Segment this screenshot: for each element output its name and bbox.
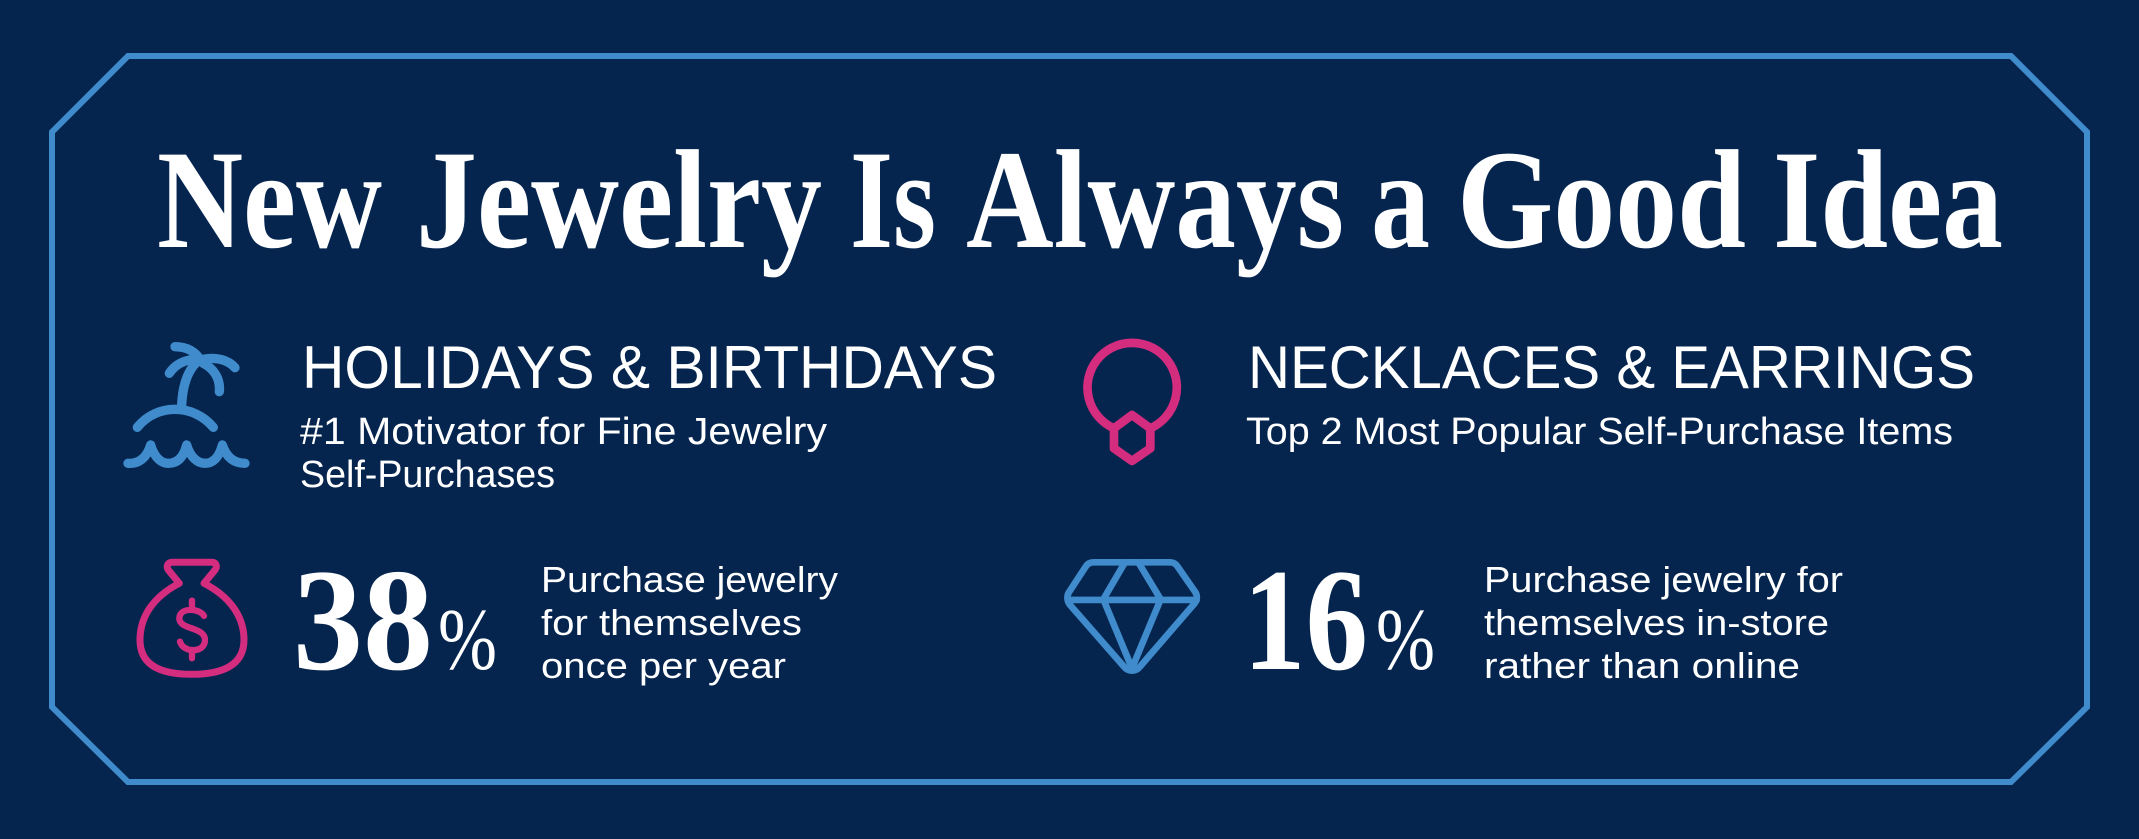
stat: 38 percent: 38 — [293, 539, 433, 701]
title: New — [157, 122, 382, 278]
text: 16 percent description: Purchase jewelry for — [1484, 559, 1843, 600]
title: Jewelry — [416, 122, 822, 278]
heading: holidays and birthdays: HOLIDAYS & BIRTHDAYS — [302, 334, 997, 401]
heading: necklaces and earrings: NECKLACES & EARRINGS — [1248, 334, 1975, 401]
title: Always — [966, 122, 1344, 278]
text: 38 percent description — [541, 559, 838, 686]
title: Is — [850, 122, 936, 278]
text: 38 percent description: Purchase jewelry — [541, 559, 838, 600]
text: popular items description: Top 2 Most Popular Self-Purchase Items — [1246, 411, 1953, 453]
title: a — [1371, 122, 1430, 278]
text: motivator description: Self-Purchases — [300, 454, 555, 496]
title — [157, 122, 2003, 278]
icon: palm island — [128, 347, 245, 463]
icon: diamond — [1067, 562, 1197, 671]
icon: necklace — [1087, 343, 1177, 461]
text: motivator description — [300, 411, 827, 496]
title: Good — [1457, 122, 1746, 278]
text: motivator description: #1 Motivator for Fine Jewelry — [300, 411, 827, 453]
stat: 38 percent: % — [438, 592, 497, 689]
text: 16 percent description: themselves in-store — [1484, 602, 1829, 643]
title: Idea — [1773, 122, 2003, 278]
text: 38 percent description: for themselves — [541, 602, 802, 643]
icon: money bag — [140, 562, 244, 674]
text: 16 percent description — [1484, 559, 1843, 686]
text: 16 percent description: rather than online — [1484, 645, 1800, 686]
stat: 16 percent: 16 — [1243, 539, 1368, 701]
text: 38 percent description: once per year — [541, 645, 786, 686]
stat: 16 percent: % — [1376, 592, 1435, 689]
